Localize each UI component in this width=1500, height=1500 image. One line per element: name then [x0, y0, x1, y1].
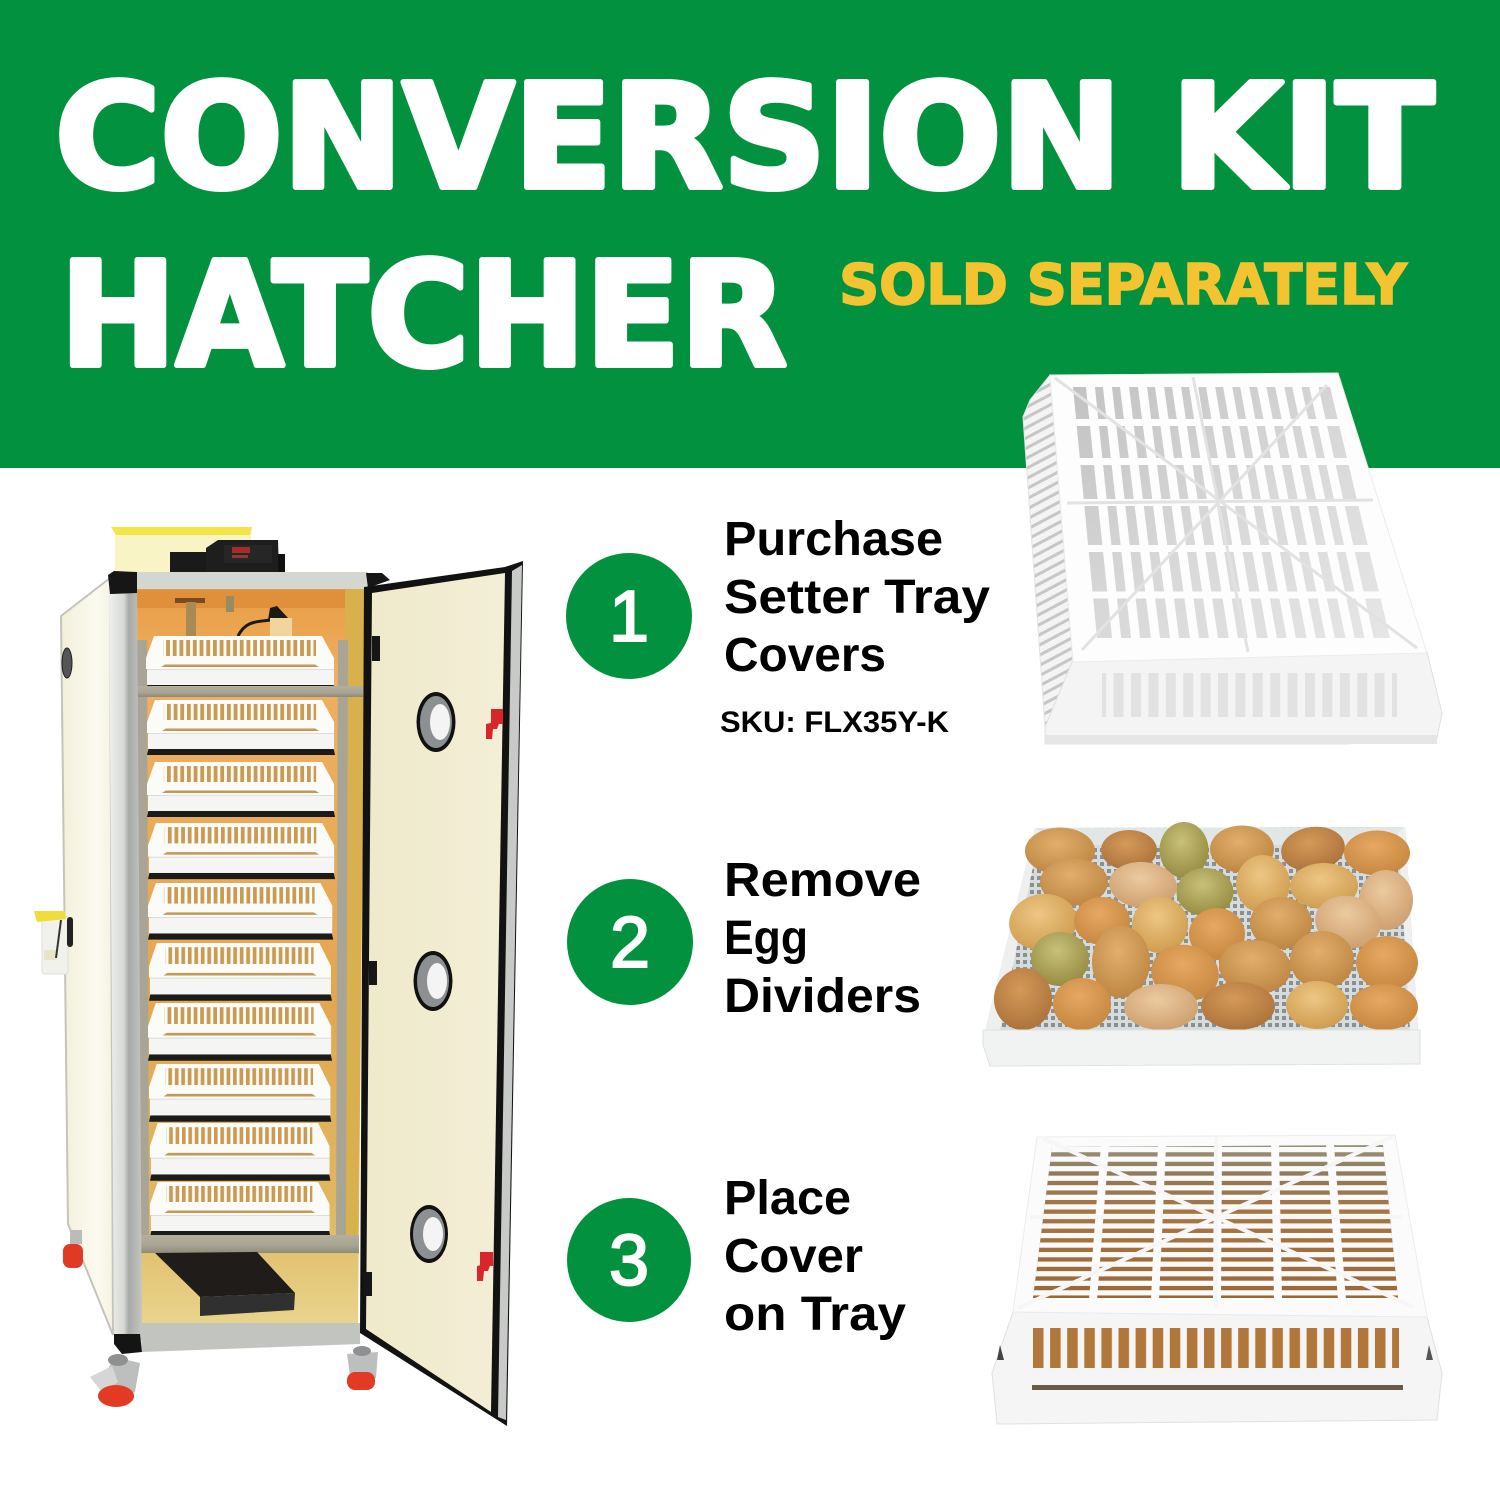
lower slit [1032, 1385, 1403, 1390]
step 3 text: on Tray [724, 1288, 906, 1341]
setter tray cover photo [1023, 373, 1442, 744]
back caster [63, 1230, 83, 1268]
step 1 text: Setter Tray [724, 571, 990, 624]
eggs [994, 822, 1418, 1030]
side notches [997, 1345, 1433, 1360]
step 3 badge [567, 1198, 691, 1322]
porthole top [416, 692, 456, 752]
step 1 badge: 1 [609, 577, 649, 657]
top face [1013, 1135, 1427, 1317]
door outline [360, 561, 523, 1426]
porthole bottom [410, 1205, 448, 1263]
tray 8 [149, 1064, 331, 1122]
door panel [366, 573, 505, 1412]
step 3 text: Cover [724, 1230, 863, 1283]
top shelf bar [137, 686, 363, 697]
yellow water box on top [111, 527, 252, 574]
step 2 text: Remove [724, 854, 921, 907]
tray 10 [150, 1182, 330, 1237]
tray 7 [148, 1003, 332, 1061]
tray 9 [150, 1123, 330, 1181]
bottom drip tray [155, 1252, 295, 1316]
hatcher cabinet [34, 527, 523, 1426]
tray left wall [985, 828, 1040, 1030]
tray 1 [146, 636, 335, 691]
cover top face [1050, 373, 1427, 662]
tray stack [146, 636, 335, 1237]
sold separately tag: SOLD SEPARATELY [839, 253, 1408, 318]
step 1 text [724, 513, 990, 682]
cover slot grid [1070, 383, 1390, 642]
tray 6 [149, 943, 332, 1001]
tray 2 [147, 700, 335, 755]
egg view slots [1033, 1145, 1398, 1300]
tray 5 [148, 883, 333, 940]
side gauge [62, 648, 72, 678]
door edge strip [498, 565, 522, 1420]
frame: left post [109, 578, 142, 1340]
egg tray photo [983, 822, 1420, 1066]
rack uprights [137, 640, 348, 1236]
tray right wall [1398, 827, 1418, 1030]
step 1 badge [566, 553, 692, 679]
step 2 text: Dividers [724, 970, 921, 1023]
interior right wall [345, 588, 365, 1236]
front slots [1033, 1328, 1399, 1368]
cover front slots [1102, 673, 1397, 717]
digital controller [170, 540, 285, 572]
title: hatcher: HATCHER [60, 231, 787, 399]
cover front wall [1045, 652, 1442, 744]
red tap top [486, 709, 503, 739]
tray 3 [147, 762, 335, 817]
cover lower lip [1045, 735, 1437, 744]
interior ceiling fittings [137, 590, 365, 638]
cover left side [1023, 375, 1073, 727]
frame: bottom rail [140, 1323, 360, 1352]
step 1 text: Covers [724, 629, 886, 682]
step 2 text: Egg [724, 912, 808, 965]
title: conversion kit: CONVERSION KIT [55, 53, 1434, 221]
front left caster [90, 1354, 140, 1407]
step 3 text [724, 1172, 906, 1341]
header band [0, 0, 1500, 468]
step 2 badge: 2 [610, 903, 650, 983]
step 3 badge: 3 [609, 1221, 649, 1301]
front right caster [347, 1346, 378, 1390]
side water bottle [34, 911, 73, 974]
porthole middle [414, 951, 452, 1011]
step 2 text [724, 854, 921, 1023]
front wall [992, 1312, 1442, 1424]
tray 4 [148, 823, 335, 879]
cabinet interior [137, 588, 365, 1323]
cabinet side panel [61, 578, 113, 1335]
red tap bottom [477, 1252, 493, 1281]
tray back and floor [988, 827, 1418, 1030]
tray back wall [1032, 827, 1407, 845]
bottom shelf bar [140, 1235, 359, 1253]
step 3 text: Place [724, 1172, 851, 1225]
open door [360, 561, 523, 1426]
cover on tray photo [992, 1135, 1442, 1424]
frame: top rail [135, 572, 368, 589]
step 1 text: Purchase [724, 513, 943, 566]
step 2 badge [567, 879, 693, 1005]
cover cross ribs [1055, 377, 1417, 652]
hinges [364, 636, 380, 1296]
tray front rim [983, 1030, 1420, 1066]
frame: black corners [108, 571, 390, 1354]
cross ribs [1018, 1137, 1413, 1308]
sku label: SKU: FLX35Y-K [720, 706, 949, 739]
